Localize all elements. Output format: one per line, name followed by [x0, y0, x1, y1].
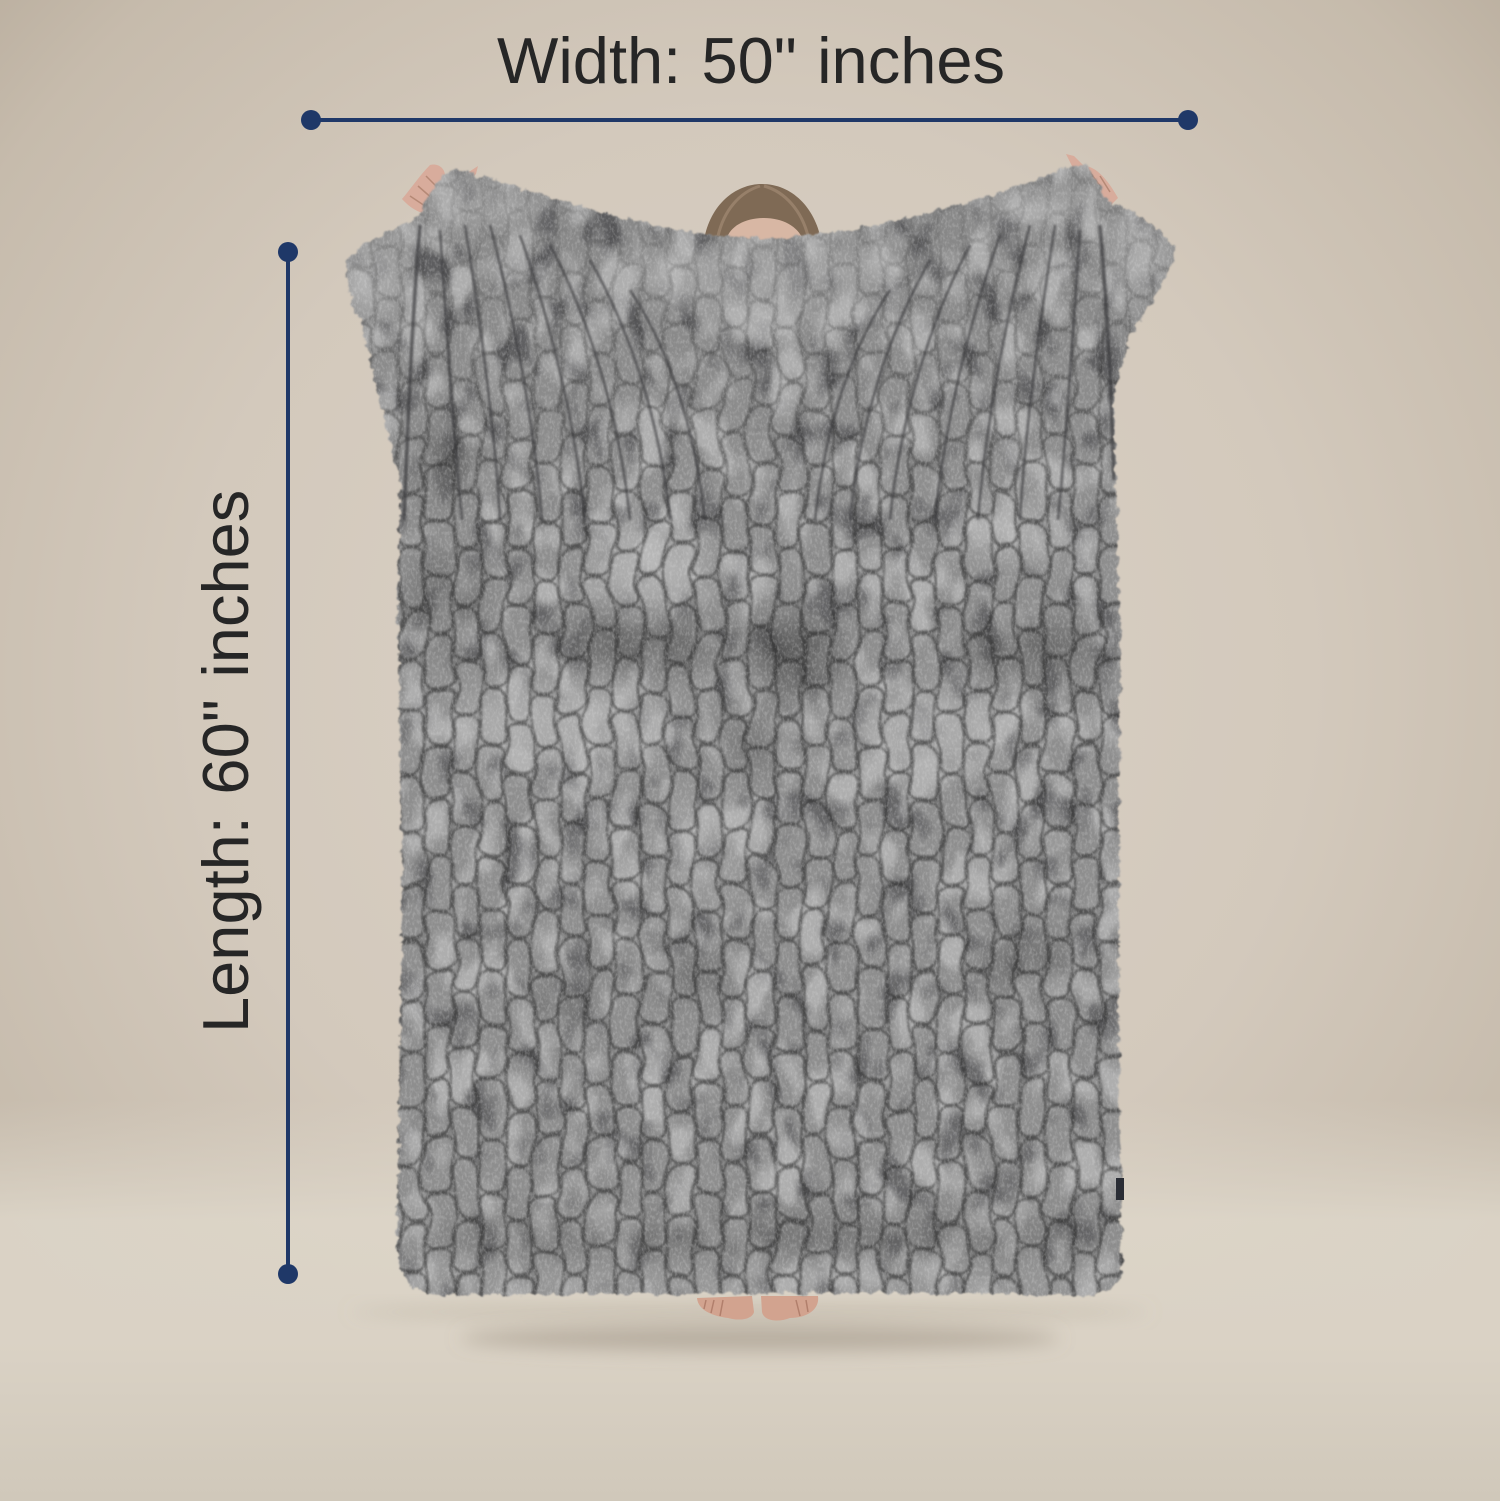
width dimension line — [301, 110, 1198, 130]
blanket: light and dark tie-dye patches — [346, 185, 1170, 1291]
person: left hand — [402, 165, 478, 214]
blanket: grey faux-fur throw — [330, 150, 1190, 1310]
person: head behind blanket — [704, 184, 821, 240]
length dimension line — [278, 242, 298, 1284]
blanket: quilted cell pattern — [330, 150, 1190, 1310]
width label: Width: 50" inches — [497, 24, 1005, 97]
blanket: fur highlights — [330, 150, 1190, 1310]
background: floor — [0, 1100, 1500, 1501]
blanket: dark blotches — [330, 150, 1190, 1310]
blanket: fan folds at the top — [404, 225, 1114, 520]
person: right hand — [1066, 154, 1118, 212]
blanket: light blotches — [330, 150, 1190, 1310]
length label: Length: 60" inches — [189, 490, 262, 1033]
person: feet — [697, 1296, 818, 1320]
floor shadow — [350, 1306, 1150, 1351]
blanket tag — [1116, 1178, 1124, 1200]
